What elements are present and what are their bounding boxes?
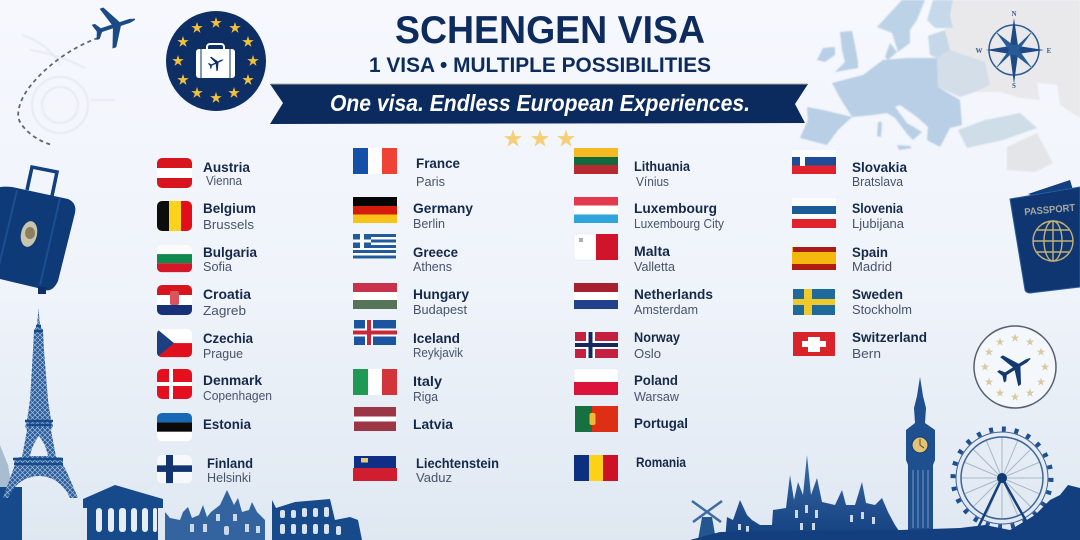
label: Lithuania: Lithuania [634,159,690,174]
landmark: Big Ben [906,377,935,534]
flag: Bulgaria [157,245,192,272]
flag: Malta [574,234,618,260]
label: Bulgaria: Bulgaria [203,245,257,260]
label: Romania: Romania [636,455,686,470]
row: Slovakia [792,150,907,189]
flag: Latvia [354,407,396,431]
row: Bulgaria [157,245,257,274]
row: Romania [574,455,686,481]
flag: France [353,148,397,174]
emblem: EU stars and suitcase [166,11,266,111]
row: Italy [353,369,443,404]
icon: suitcase [0,167,75,294]
row: Greece [353,234,458,274]
landmark: Parthenon [83,485,163,540]
label: Czechia: Czechia [203,331,253,346]
label: Slovakia: Slovakia [852,160,907,175]
icon: airplane [88,0,141,52]
label: Slovenia: Slovenia [852,201,903,216]
row: Sweden [793,287,912,317]
label: Greece: Greece [413,245,458,260]
flag: Spain [792,247,836,270]
landmark: castle [165,490,265,540]
landmark: Ferris wheel [953,429,1051,528]
flag: Czechia [157,329,192,357]
row: Croatia [157,285,252,318]
flight path [18,38,98,145]
label: Finland: Finland [207,456,253,471]
label: Ljubijana: Ljubijana [852,217,904,231]
label: Luxembourg: Luxembourg [634,201,717,216]
flag: Finland [157,455,192,483]
row: Norway [575,330,680,361]
label: Spain: Spain [852,245,888,260]
skyline: left edge [0,445,22,540]
label: Switzerland: Switzerland [852,330,927,345]
flag: Switzerland [793,332,835,356]
label: Sofia: Sofia [203,260,232,274]
row: Austria [157,158,250,188]
label: Paris: Paris [416,175,445,189]
row: Liechtenstein [353,456,499,485]
label: Amsterdam: Amsterdam [634,303,698,317]
banner: One visa. Endless European Experiences. [330,90,750,116]
label: Stockholm: Stockholm [852,303,912,317]
label: Netherlands: Netherlands [634,287,713,302]
label: Norway: Norway [634,330,680,345]
landmark: right city skyline [725,455,905,540]
label: Berlin: Berlin [413,217,445,231]
icon: compass: E [1047,47,1052,55]
label: Croatia: Croatia [203,287,252,302]
label: Budapest: Budapest [413,303,468,317]
icon: compass: N [1011,10,1017,18]
row: Malta [574,234,675,274]
flag: Italy [353,369,397,395]
icon: compass [976,10,1052,90]
flag: Estonia [157,413,192,441]
country list: column 4 [792,150,927,361]
label: Copenhagen: Copenhagen [203,389,272,403]
row: Portugal [575,406,688,432]
label: Oslo: Oslo [634,347,661,361]
row: Finland [157,455,253,485]
label: Sweden: Sweden [852,287,903,302]
icon: passport [1010,180,1080,293]
flag: Croatia [157,285,192,315]
flag: Netherlands [574,283,618,309]
row: Germany [353,197,474,231]
row: Spain [792,245,892,274]
label: Denmark: Denmark [203,373,262,388]
row: Estonia [157,413,251,441]
flag: Belgium [157,201,192,231]
row: Lithuania [574,148,690,189]
label: Poland: Poland [634,373,678,388]
row: Slovenia [792,198,904,231]
country list: column 2 [353,148,499,485]
flag: Liechtenstein [353,456,397,481]
flag: Slovakia [792,150,836,174]
label: Liechtenstein: Liechtenstein [416,456,499,471]
flag: Lithuania [574,148,618,174]
row: France [353,148,460,189]
map of Europe [800,0,1080,172]
label: Riga: Riga [413,390,438,404]
label: Bern: Bern [852,347,881,361]
label: Luxembourg City: Luxembourg City [634,217,725,231]
banner [270,84,808,124]
row: Luxembourg [574,197,725,231]
label: Vinius: Vínius [636,175,669,189]
label: Reykjavik: Reykjavik [413,346,464,360]
label: Bratslava: Bratslava [852,175,903,189]
pale globe watermark [22,35,115,133]
label: Estonia: Estonia [203,417,251,432]
label: Belgium: Belgium [203,201,256,216]
flag: Sweden [793,289,835,315]
label: Italy: Italy [413,374,443,389]
row: Iceland [353,320,464,360]
flag: Iceland [353,320,397,345]
skyline: right ground and trees [690,485,1080,540]
landmark: Colosseum [272,499,362,540]
row: Denmark [157,369,272,403]
label: Helsinki: Helsinki [207,471,251,485]
flag: Austria [157,158,192,188]
subtitle: 1 VISA • MULTIPLE POSSIBILITIES [369,54,711,77]
label: Athens: Athens [413,260,452,274]
flag: Slovenia [792,198,836,228]
icon: compass: W [976,47,982,55]
label: Vienna: Vienna [206,174,242,188]
country list: column 1 [157,158,272,485]
flag: Poland [574,369,618,395]
title: SCHENGEN VISA [395,9,705,52]
row: Poland [574,369,680,404]
landmark: Eiffel Tower [3,308,78,498]
flag: Greece [353,234,396,259]
label: Malta: Malta [634,244,671,259]
label: Iceland: Iceland [413,331,460,346]
row: Czechia [157,329,253,361]
label: Brussels: Brussels [203,218,254,232]
icon: plane badge [974,326,1056,408]
flag: Romania [574,455,618,481]
label: Madrid: Madrid [852,260,892,274]
flag: Hungary [353,283,397,309]
flag: Germany [353,197,397,223]
label: Vaduz: Vaduz [416,471,452,485]
row: Netherlands [574,283,713,317]
country list: column 3 [574,148,725,481]
label: France: France [416,156,460,171]
label: Prague: Prague [203,347,243,361]
three gold stars [504,130,575,147]
label: Austria: Austria [203,160,250,175]
label: Zagreb: Zagreb [203,304,246,318]
row: Hungary [353,283,469,317]
landmark: windmill [692,501,722,540]
flag: Denmark [157,369,192,399]
flag: Norway [575,332,618,358]
label: Germany: Germany [413,201,474,216]
row: Latvia [354,407,453,432]
row: Switzerland [793,330,927,361]
label: Warsaw: Warsaw [634,390,680,404]
flag: Luxembourg [574,197,618,223]
label: Latvia: Latvia [413,417,453,432]
icon: compass: S [1012,82,1016,90]
row: Belgium [157,201,256,232]
icon: passport: PASSPORT [1024,203,1076,218]
label: Portugal: Portugal [634,416,688,431]
label: Hungary: Hungary [413,287,469,302]
flag: Portugal [575,406,618,432]
label: Valletta: Valletta [634,260,675,274]
